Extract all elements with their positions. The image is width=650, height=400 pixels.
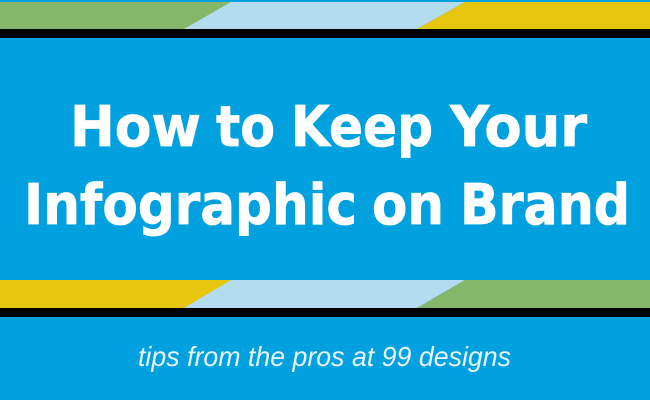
- bottom colour band: [0, 280, 650, 317]
- title: Keep: [291, 95, 433, 160]
- title: How: [70, 95, 201, 160]
- title: to: [216, 95, 275, 160]
- title: Brand: [460, 173, 630, 238]
- title: [24, 95, 630, 238]
- title: on: [372, 173, 444, 238]
- subtitle: tips from the pros at 99 designs: [138, 341, 511, 372]
- top colour band: [0, 2, 650, 38]
- title: Your: [449, 95, 587, 160]
- title: Infographic: [24, 173, 357, 238]
